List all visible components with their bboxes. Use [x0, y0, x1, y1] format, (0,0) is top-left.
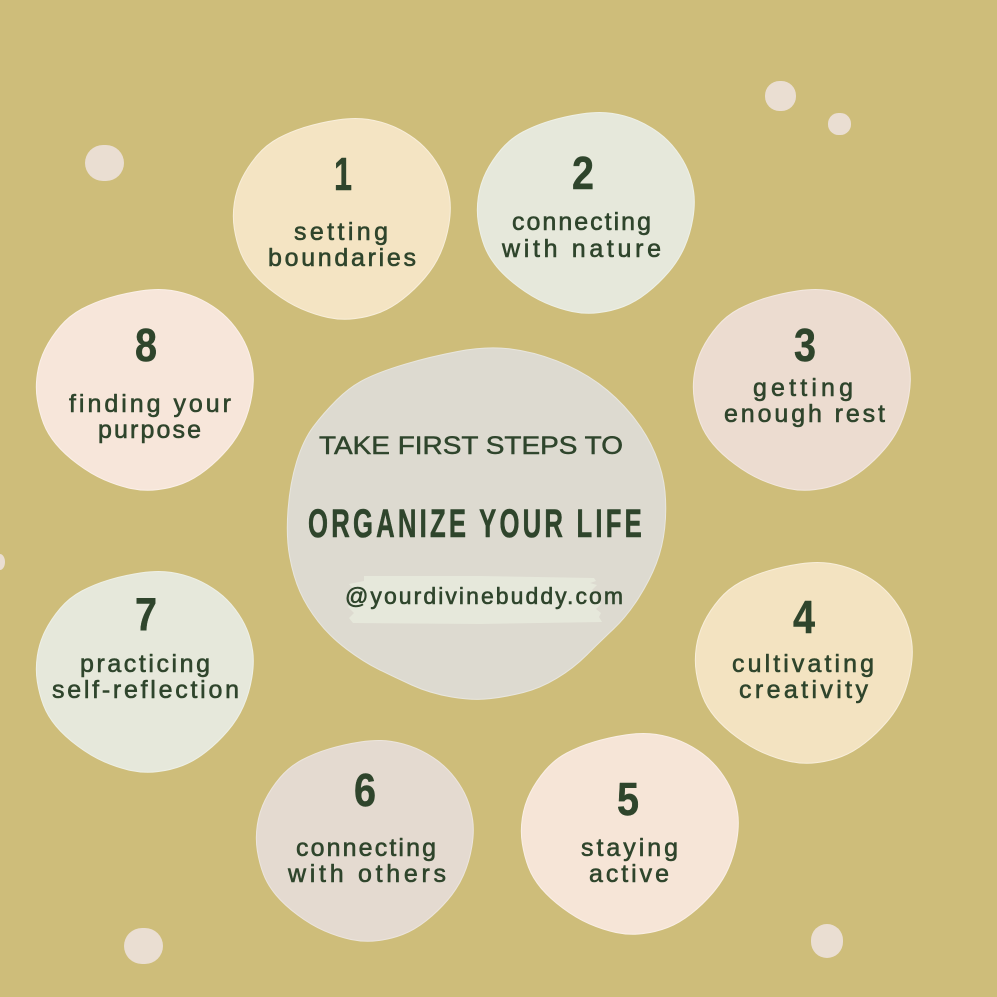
- step 1: setting boundaries: boundaries: [268, 244, 416, 272]
- step 5: staying active: staying: [581, 834, 678, 862]
- decorative dots: [0, 81, 851, 964]
- step 7: practicing self-reflection: [36, 571, 253, 772]
- step 2: connecting with nature: connecting: [512, 208, 651, 236]
- step 6: connecting with others: [256, 740, 473, 941]
- step 6: connecting with others: 6: [354, 764, 376, 816]
- step 4: cultivating creativity: [695, 562, 912, 763]
- website handle: @yourdivinebuddy.com: [345, 583, 623, 609]
- step 7: practicing self-reflection: self-reflection: [52, 676, 239, 704]
- step 5: staying active: active: [589, 860, 669, 888]
- step 8: finding your purpose: [36, 289, 253, 490]
- step 8: finding your purpose: purpose: [98, 416, 201, 444]
- step 5: staying active: [521, 733, 738, 934]
- step 7: practicing self-reflection: practicing: [80, 650, 210, 678]
- central panel: [287, 348, 666, 699]
- center blob: [287, 348, 666, 699]
- step 1: setting boundaries: [233, 118, 450, 319]
- step 1: setting boundaries: setting: [294, 218, 388, 246]
- step 6: connecting with others: with others: [287, 860, 446, 888]
- step 3: getting enough rest: getting: [753, 374, 853, 402]
- step 7: practicing self-reflection: 7: [135, 588, 157, 640]
- step 6: connecting with others: connecting: [296, 834, 436, 862]
- step 8: finding your purpose: 8: [135, 319, 157, 371]
- brush stroke behind handle: [348, 576, 602, 624]
- step 4: cultivating creativity: 4: [793, 591, 815, 643]
- heading line 1: TAKE FIRST STEPS TO: [319, 432, 623, 460]
- step 2: connecting with nature: [477, 112, 694, 313]
- step 8: finding your purpose: finding your: [69, 390, 231, 418]
- main heading: ORGANIZE YOUR LIFE: [308, 502, 645, 546]
- step 1: setting boundaries: 1: [334, 148, 352, 200]
- step 4: cultivating creativity: creativity: [739, 676, 868, 704]
- step 2: connecting with nature: 2: [572, 147, 594, 199]
- step 2: connecting with nature: with nature: [501, 235, 661, 263]
- step 3: getting enough rest: enough rest: [724, 400, 885, 428]
- step 4: cultivating creativity: cultivating: [732, 650, 874, 678]
- step 5: staying active: 5: [617, 773, 639, 825]
- step 3: getting enough rest: [693, 289, 910, 490]
- step 3: getting enough rest: 3: [794, 319, 816, 371]
